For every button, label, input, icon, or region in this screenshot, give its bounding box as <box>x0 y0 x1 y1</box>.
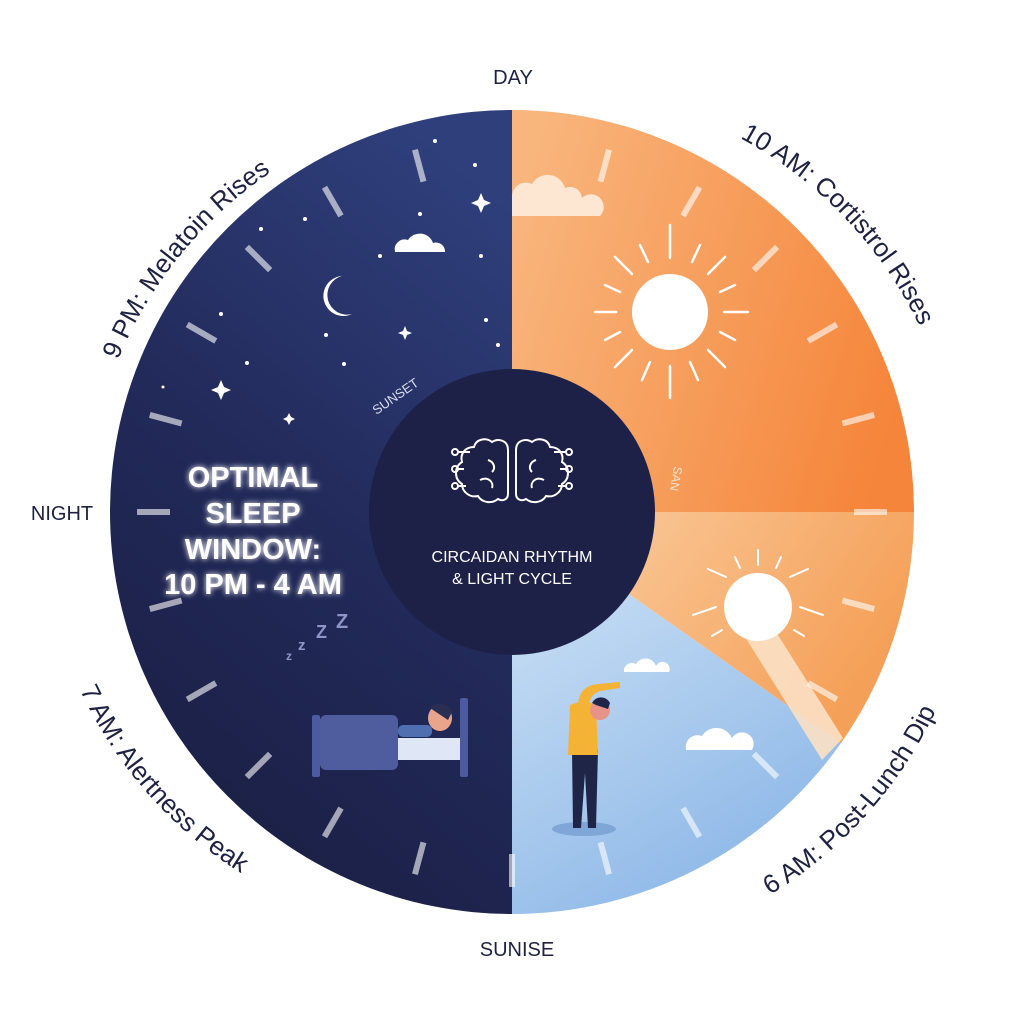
label: night: NIGHT <box>31 503 93 525</box>
text: optimal sleep window: WINDOW: <box>185 534 321 566</box>
text: optimal sleep window: 10 PM - 4 AM <box>164 569 342 601</box>
panel: day quadrant <box>512 110 914 512</box>
icon: stretching person <box>552 682 620 836</box>
center text: CIRCAIDAN RHYTHM <box>432 549 592 566</box>
label: sunrise: SUNISE <box>480 939 554 961</box>
label: 7 AM: 7 AM: Alertness Peak <box>82 683 248 874</box>
panel: morning wedge <box>512 512 841 914</box>
icon: moon <box>323 276 352 316</box>
icon: morning clouds <box>624 658 754 750</box>
center circle <box>369 369 655 655</box>
icon: zzz: Z <box>316 622 327 642</box>
icon: sleeping person in bed <box>312 698 468 777</box>
panel: night half <box>110 110 512 914</box>
label: 10 AM: 10 AM: Cortistrol Rises <box>742 126 930 324</box>
text: optimal sleep window: SLEEP <box>205 498 301 530</box>
icon: night cloud <box>395 234 445 252</box>
icon: zzz <box>286 611 348 663</box>
label: day: DAY <box>493 67 533 89</box>
text: optimal sleep window <box>164 462 342 601</box>
label: 9 PM: 9 PM: Melatoin Rises <box>103 162 269 358</box>
icon: day cloud <box>512 175 604 216</box>
icon: zzz: z <box>298 637 306 654</box>
text: optimal sleep window: OPTIMAL <box>188 462 318 494</box>
panel: afternoon wedge <box>512 512 914 743</box>
stars <box>162 139 500 425</box>
text: sunset: SUNSET <box>370 375 421 418</box>
center circle: & LIGHT CYCLE <box>452 571 572 588</box>
tick marks <box>137 150 887 887</box>
text: san: SAN <box>667 465 685 492</box>
sun beam <box>742 632 843 760</box>
icon: zzz: z <box>286 649 292 663</box>
label: 6 AM: 6 AM: Post-Lunch Dip <box>764 707 936 892</box>
icon: sun <box>595 225 748 398</box>
icon: brain <box>452 439 572 502</box>
icon: afternoon sun <box>693 550 823 641</box>
icon: zzz: Z <box>336 611 348 633</box>
